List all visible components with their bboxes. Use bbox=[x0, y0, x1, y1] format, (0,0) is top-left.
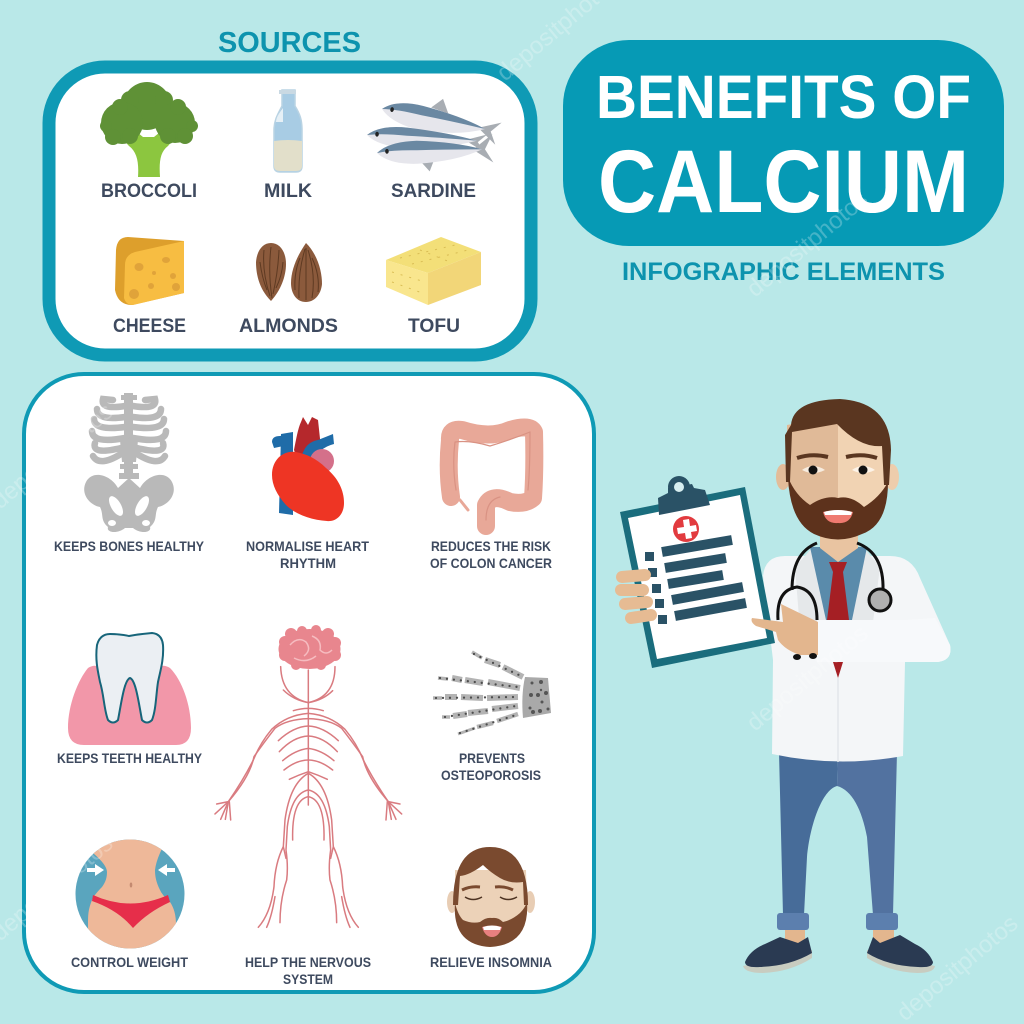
label: normalise heart rhythm: NORMALISE HEART bbox=[246, 538, 369, 554]
icon: osteoporosis hand bbox=[433, 652, 551, 734]
tie bbox=[827, 562, 849, 678]
icon: tofu bbox=[386, 237, 481, 305]
icon: broccoli bbox=[100, 82, 198, 177]
holding hand bbox=[621, 575, 651, 618]
label: help the nervous system: HELP THE NERVOUS bbox=[245, 954, 371, 970]
face bbox=[787, 415, 838, 535]
label: tofu: TOFU bbox=[408, 316, 460, 337]
icon: nervous system bbox=[215, 625, 402, 927]
hair bbox=[785, 399, 891, 485]
label: almonds: ALMONDS bbox=[239, 316, 338, 337]
sleeve bbox=[817, 618, 950, 662]
label: sardine: SARDINE bbox=[391, 181, 476, 202]
eyes and brows bbox=[797, 455, 877, 474]
ankles bbox=[785, 928, 894, 943]
icon: skeleton bbox=[84, 393, 174, 532]
label: normalise heart rhythm bbox=[246, 538, 369, 571]
neck bbox=[820, 530, 858, 562]
lapels bbox=[795, 548, 880, 630]
sardine fish middle bbox=[366, 125, 487, 152]
clipboard clip bbox=[658, 476, 710, 515]
sardine fish bottom bbox=[376, 134, 494, 173]
earpiece tips bbox=[793, 653, 817, 660]
watermark: depositphotos bbox=[742, 620, 873, 737]
label: help the nervous system bbox=[245, 954, 371, 987]
sardine fish top bbox=[379, 88, 504, 145]
panel: sources bbox=[49, 67, 531, 355]
watermark: depositphotos bbox=[892, 910, 1023, 1024]
title line two: CALCIUM bbox=[598, 131, 969, 231]
checklist lines bbox=[662, 540, 746, 616]
label: broccoli: BROCCOLI bbox=[101, 181, 197, 202]
checklist bullets bbox=[645, 552, 667, 624]
label: reduces the risk of colon cancer bbox=[430, 538, 552, 571]
label: keeps teeth healthy: KEEPS TEETH HEALTHY bbox=[57, 750, 203, 766]
label: reduces the risk of colon cancer: REDUCES THE RISK bbox=[431, 538, 551, 554]
label: help the nervous system: SYSTEM bbox=[283, 971, 333, 987]
stethoscope bbox=[778, 543, 891, 620]
ears bbox=[776, 464, 899, 490]
coat front line bbox=[837, 678, 839, 762]
label: control weight: CONTROL WEIGHT bbox=[71, 954, 188, 970]
shoe left bbox=[743, 937, 812, 973]
icon: cheese bbox=[115, 237, 184, 305]
trousers bbox=[779, 752, 897, 915]
arrow: left waist bbox=[87, 864, 104, 876]
brain bbox=[278, 625, 341, 670]
label: prevents osteoporosis: OSTEOPOROSIS bbox=[441, 767, 541, 783]
icon: colon bbox=[449, 427, 534, 526]
arrow: right waist bbox=[158, 864, 175, 876]
shoe right bbox=[867, 935, 935, 973]
icon: waist control weight bbox=[76, 840, 184, 948]
doctor character bbox=[620, 399, 950, 973]
beard bbox=[788, 477, 888, 540]
title line one: BENEFITS OF bbox=[596, 63, 971, 131]
label: cheese: CHEESE bbox=[113, 316, 186, 337]
coat bbox=[763, 556, 950, 762]
sources heading: SOURCES bbox=[218, 27, 361, 59]
clipboard bbox=[620, 476, 775, 668]
pointing hand bbox=[752, 604, 818, 655]
icon: sardines bbox=[366, 88, 504, 173]
trouser cuffs bbox=[777, 913, 898, 930]
medical cross badge bbox=[673, 516, 699, 542]
label: milk: MILK bbox=[264, 181, 312, 202]
icon: almonds bbox=[256, 243, 322, 302]
label: prevents osteoporosis: PREVENTS bbox=[459, 750, 525, 766]
label: keeps bones healthy: KEEPS BONES HEALTHY bbox=[54, 538, 205, 554]
mouth bbox=[823, 510, 853, 523]
watermark: depositphotos bbox=[742, 186, 873, 303]
icon: tooth and gum bbox=[68, 633, 191, 745]
label: normalise heart rhythm: RHYTHM bbox=[280, 555, 336, 571]
panel: benefits bbox=[24, 374, 594, 992]
title banner bbox=[563, 40, 1004, 246]
label: relieve insomnia: RELIEVE INSOMNIA bbox=[430, 954, 552, 970]
icon: sleeping face bbox=[447, 847, 535, 947]
label: prevents osteoporosis bbox=[441, 750, 541, 783]
shirt bbox=[810, 547, 867, 620]
subtitle: INFOGRAPHIC ELEMENTS bbox=[622, 258, 945, 286]
icon: milk bottle bbox=[274, 90, 302, 172]
label: reduces the risk of colon cancer: OF COLON CANCER bbox=[430, 555, 552, 571]
icon: heart bbox=[272, 417, 344, 521]
